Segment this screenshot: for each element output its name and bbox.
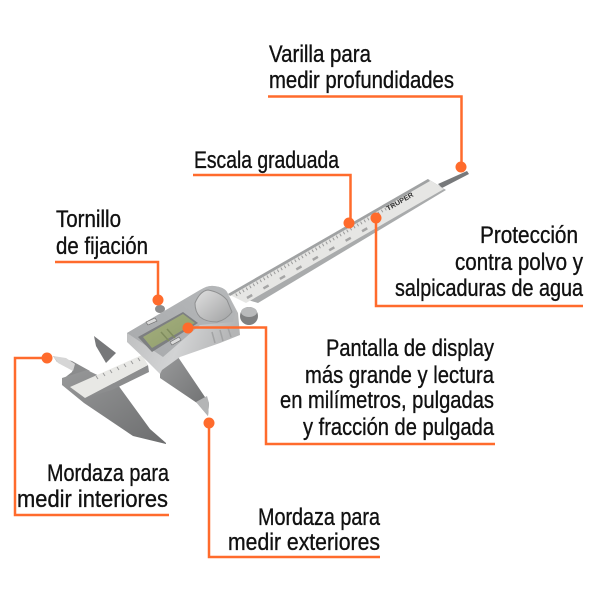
body grip ribs	[212, 328, 231, 343]
slider top face	[127, 286, 236, 357]
buttons	[146, 318, 157, 325]
callout: depth rod: medir profundidades	[269, 67, 454, 94]
callout: inner jaws: Mordaza para	[47, 460, 170, 487]
callout: display	[182, 322, 495, 444]
callout: display: en milímetros, pulgadas	[280, 387, 494, 414]
callout: graduated scale	[193, 147, 354, 228]
callout: dust and water protection: contra polvo y	[455, 249, 583, 276]
callout: inner jaws	[15, 352, 170, 515]
callout: display: más grande y lectura	[305, 362, 495, 389]
brand label on beam: TRUPER	[386, 192, 415, 213]
callout: dust and water protection	[370, 212, 584, 306]
beam front section	[85, 365, 149, 398]
callout: locking screw: de fijación	[56, 233, 148, 260]
callout: dust and water protection: Protección	[480, 222, 578, 249]
callout: display: Pantalla de display	[326, 335, 494, 362]
dial housing	[195, 290, 232, 322]
callout: depth rod	[268, 41, 466, 172]
fixed lower jaw	[62, 370, 166, 444]
callout: inner jaws: medir interiores	[17, 486, 168, 513]
beam scale ticks	[236, 203, 396, 295]
icon: digital caliper	[53, 171, 469, 444]
thumb wheel	[240, 307, 258, 325]
callout: outer jaws: Mordaza para	[258, 504, 381, 531]
callout: locking screw	[55, 206, 164, 306]
sliding lower jaw	[160, 357, 209, 416]
callout: outer jaws: medir exteriores	[228, 529, 380, 556]
locking screw	[155, 305, 165, 313]
depth rod	[438, 171, 469, 188]
LCD screen	[138, 312, 198, 352]
main beam	[228, 179, 446, 303]
callout: graduated scale: Escala graduada	[194, 147, 340, 174]
slider body	[127, 286, 240, 374]
upper right inner jaw	[94, 336, 116, 363]
callout: outer jaws	[204, 418, 381, 557]
callout: locking screw: Tornillo	[56, 206, 121, 233]
upper left inner jaw	[53, 356, 90, 379]
callout: depth rod: Varilla para	[269, 41, 372, 68]
callout: display: y fracción de pulgada	[303, 414, 495, 441]
